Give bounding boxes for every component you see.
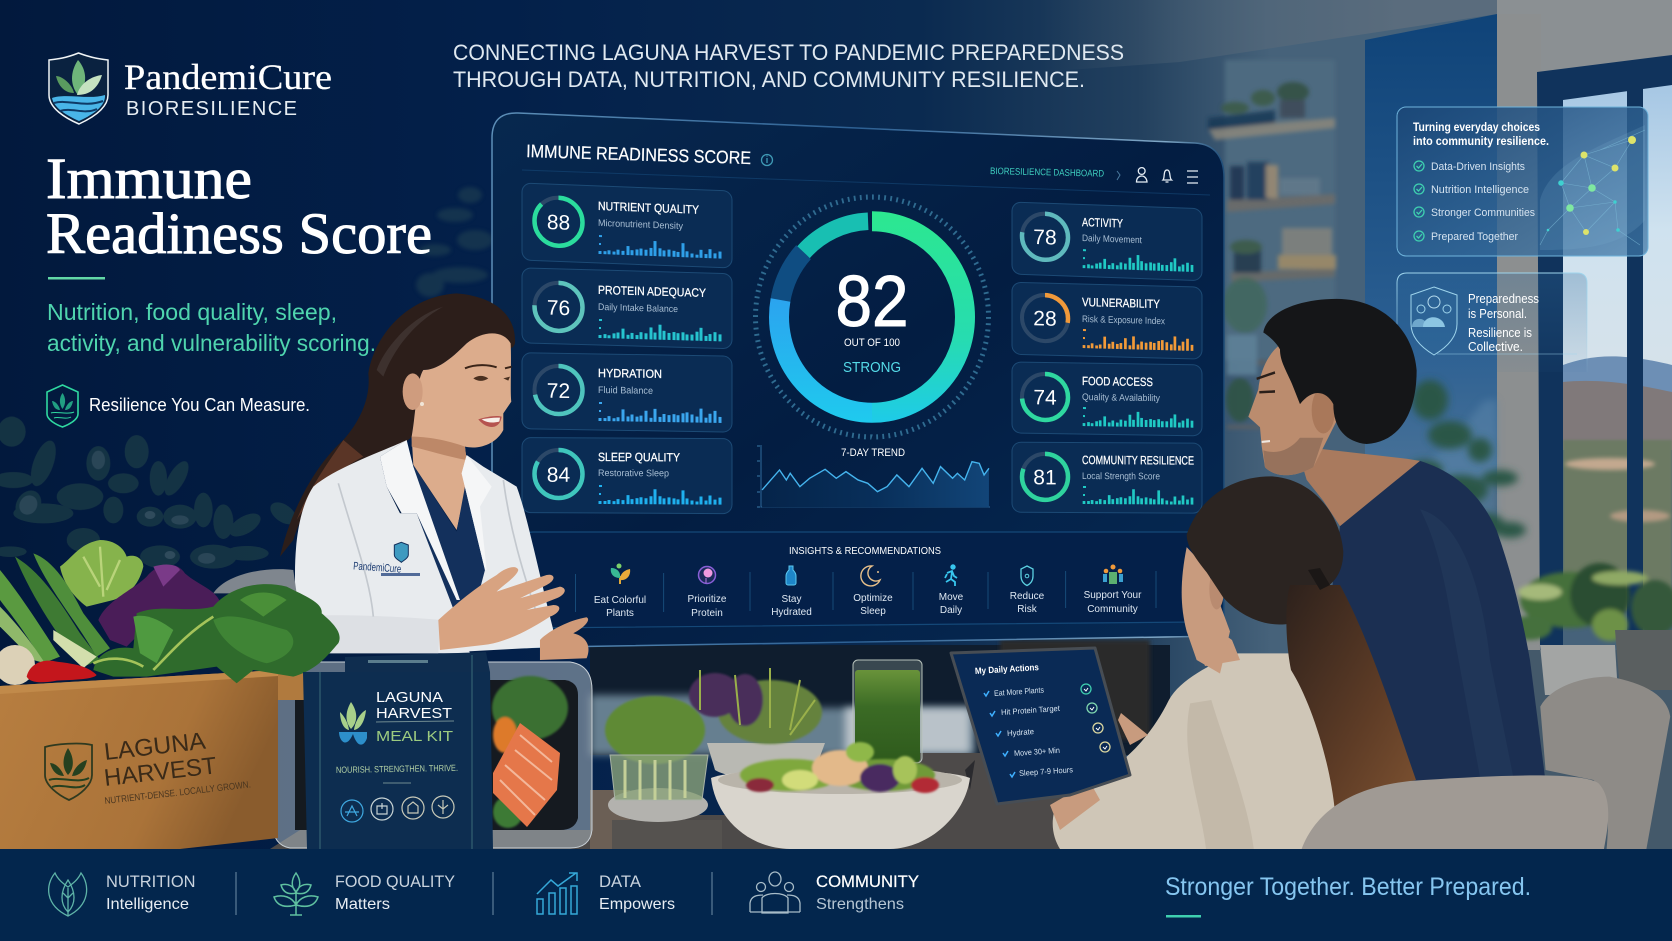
person: woman presenter (280, 293, 589, 660)
card: vulnerability (1012, 282, 1202, 359)
crate wordmark: NUTRIENT-DENSE. LOCALLY GROWN. (104, 779, 251, 807)
item: eat colorful plants (594, 564, 646, 619)
floating panel: community resilience: into community resilience. (1413, 136, 1549, 148)
card: activity: ACTIVITY (1082, 215, 1123, 231)
card: vulnerability: 28 (1033, 307, 1057, 331)
card: sleep quality: Restorative Sleep (598, 468, 669, 479)
table (270, 753, 1180, 849)
brand tagline: BIORESILIENCE (126, 98, 297, 120)
scrubs (413, 465, 487, 652)
top statement (453, 40, 1124, 92)
kit name: LAGUNA (376, 689, 443, 706)
card: vulnerability: Risk & Exposure Index (1082, 314, 1165, 327)
footer: food quality matters: FOOD QUALITY (335, 872, 455, 891)
item: reduce risk: Risk (1017, 604, 1038, 615)
footer: nutrition intelligence: Intelligence (106, 896, 189, 913)
item: support your community: Support Your (1084, 590, 1142, 601)
footer: data empowers: Empowers (599, 896, 675, 913)
blurred plant near man (1407, 380, 1526, 538)
item: stay hydrated: Stay (781, 594, 802, 605)
brand logo lockup (49, 53, 332, 124)
card: protein adequacy: PROTEIN ADEQUACY (598, 283, 706, 300)
microgreens cup (605, 696, 708, 822)
wooden crate (0, 670, 348, 849)
ponytail (1286, 585, 1416, 812)
person: girl (1050, 476, 1416, 849)
badge: resilience you can measure (47, 385, 310, 427)
plant lower right with pots (1508, 563, 1672, 695)
tablet: Eat More Plants (994, 686, 1044, 698)
tablet: Hit Protein Target (1001, 704, 1061, 717)
card: protein adequacy: Daily Intake Balance (598, 302, 678, 315)
hands (1050, 713, 1148, 830)
meal tray (273, 662, 592, 848)
main heading (46, 146, 432, 266)
card: hydration: 72 (547, 380, 570, 403)
crate logo (45, 744, 92, 800)
footer: food quality matters (274, 872, 455, 915)
item: move daily: Move (939, 592, 964, 603)
main heading: Immune (46, 146, 252, 211)
network map (1540, 130, 1645, 245)
floating panel: preparedness (1397, 273, 1587, 372)
item: eat colorful plants: Eat Colorful (594, 595, 646, 606)
card: activity: Daily Movement (1082, 233, 1142, 246)
subheading: Nutrition, food quality, sleep, (47, 299, 337, 325)
card: food access: Quality & Availability (1082, 392, 1160, 404)
insights and recommendations panel (525, 532, 1204, 628)
icon: shield with people (1411, 287, 1457, 355)
badge: resilience you can measure: Resilience You Can Measure. (89, 395, 310, 415)
chairs (1302, 677, 1670, 849)
smoothie glass (853, 660, 922, 763)
purple cabbage (98, 565, 222, 647)
head and hair (1182, 476, 1343, 673)
card: vulnerability: VULNERABILITY (1082, 295, 1160, 311)
lab coat (295, 440, 557, 653)
card: food access: 74 (1033, 386, 1057, 410)
chart: 7-day trend (757, 445, 990, 507)
subheading (47, 299, 376, 356)
footer: data empowers: DATA (599, 872, 642, 891)
card: sleep quality: 84 (547, 464, 570, 487)
item: reduce risk: Reduce (1010, 591, 1045, 602)
item: move daily (939, 565, 964, 616)
panel text: Preparedness (1468, 292, 1539, 306)
blurred background plants left (0, 417, 300, 569)
floating panel: community resilience (1397, 107, 1648, 256)
checklist (1414, 161, 1535, 243)
fresh produce (0, 540, 340, 685)
item: support your community (1084, 564, 1142, 615)
dashboard title: IMMUNE READINESS SCORE (526, 141, 751, 168)
tablet (951, 648, 1130, 804)
crate wordmark (103, 728, 251, 807)
item: support your community: Community (1087, 604, 1138, 615)
item: optimize sleep (853, 566, 893, 617)
score caption: OUT OF 100 (844, 337, 900, 349)
coat logo shield (394, 542, 408, 562)
card: community resilience: Local Strength Score (1082, 471, 1160, 482)
hands (438, 567, 565, 650)
tablet: Hydrate (1007, 727, 1035, 738)
footer: community strengthens: Strengthens (816, 896, 904, 913)
shelves with decor (1208, 82, 1336, 429)
kit logo (339, 702, 367, 745)
item: prioritize protein (688, 566, 727, 619)
checklist: Prepared Together (1431, 231, 1518, 243)
leeks (15, 557, 100, 667)
item: stay hydrated: Hydrated (771, 607, 812, 618)
card: food access: FOOD ACCESS (1082, 374, 1153, 389)
crate wordmark: LAGUNA (103, 728, 207, 766)
meal kit box: HARVEST (376, 705, 452, 722)
item: optimize sleep: Sleep (860, 606, 886, 617)
card: hydration: HYDRATION (598, 366, 662, 381)
blurred plants behind headline (416, 187, 493, 297)
footer: nutrition intelligence: NUTRITION (106, 872, 196, 891)
dark leafy greens (93, 584, 340, 683)
checklist: Stronger Communities (1431, 207, 1535, 219)
checklist: Data-Driven Insights (1431, 161, 1525, 173)
item: reduce risk (1010, 566, 1045, 615)
panel text: Resilience is (1468, 326, 1532, 340)
card: community resilience (1012, 442, 1202, 513)
top statement: THROUGH DATA, NUTRITION, AND COMMUNITY RESILIENCE. (453, 67, 1085, 92)
card: sleep quality (522, 438, 732, 514)
lettuce (60, 540, 143, 607)
card: nutrient quality: NUTRIENT QUALITY (598, 199, 699, 217)
icon: shield logo (49, 53, 108, 124)
item: stay hydrated (771, 566, 812, 618)
item: eat colorful plants: Plants (606, 608, 634, 619)
kit tagline: NOURISH. STRENGTHEN. THRIVE. (336, 763, 458, 775)
card: protein adequacy: 76 (547, 297, 570, 320)
score status: STRONG (843, 359, 901, 376)
footer: data empowers (537, 872, 675, 914)
card: nutrient quality: Micronutrient Density (598, 218, 683, 232)
card: activity (1012, 202, 1202, 281)
card: activity: 78 (1033, 226, 1057, 250)
card: nutrient quality (522, 183, 732, 268)
card: community resilience: COMMUNITY RESILIENCE (1082, 453, 1194, 468)
meal kit box: MEAL KIT (376, 728, 453, 745)
tablet: Move 30+ Min (1014, 746, 1060, 758)
sweater (1053, 653, 1413, 849)
footer band (0, 849, 1672, 941)
footer tagline: Stronger Together. Better Prepared. (1165, 873, 1531, 901)
dashboard nav (990, 166, 1198, 183)
card: nutrient quality: 88 (547, 211, 570, 235)
card: food access (1012, 362, 1202, 436)
footer: food quality matters: Matters (335, 896, 390, 913)
insights heading: INSIGHTS & RECOMMENDATIONS (789, 545, 941, 557)
main heading: Readiness Score (46, 201, 432, 266)
item: move daily: Daily (940, 605, 962, 616)
card: hydration (522, 353, 732, 432)
score value: 82 (836, 262, 908, 342)
crate wordmark: HARVEST (103, 752, 218, 792)
item: prioritize protein: Protein (691, 608, 723, 619)
chart: 7-day trend: 7-DAY TREND (841, 447, 905, 459)
card: protein adequacy (522, 268, 732, 349)
checklist: Nutrition Intelligence (1431, 184, 1529, 196)
subheading: activity, and vulnerability scoring. (47, 330, 376, 356)
gauge: overall score 82 (756, 197, 988, 437)
panel text (1468, 292, 1539, 354)
meal kit box (303, 652, 493, 849)
kit benefit icons (341, 796, 454, 822)
footer: community strengthens (750, 872, 919, 913)
footer: community strengthens: COMMUNITY (816, 872, 919, 891)
card: hydration: Fluid Balance (598, 385, 653, 397)
item: optimize sleep: Optimize (853, 593, 893, 604)
icon: info (762, 154, 772, 166)
person: man (1248, 299, 1545, 800)
tablet: My Daily Actions (975, 662, 1039, 676)
footer: nutrition intelligence (49, 872, 196, 916)
card: sleep quality: SLEEP QUALITY (598, 450, 680, 464)
coat logo text: PandemiCure (353, 560, 402, 576)
dashboard nav: BIORESILIENCE DASHBOARD (990, 166, 1104, 180)
hair (280, 293, 515, 557)
onion (0, 645, 35, 685)
dashboard panel (492, 113, 1224, 648)
panel heading: Turning everyday choices (1413, 122, 1540, 134)
item: prioritize protein: Prioritize (688, 594, 727, 605)
salad bowl (711, 742, 970, 849)
microgreens bowl (689, 668, 825, 779)
top statement: CONNECTING LAGUNA HARVEST TO PANDEMIC PREPAREDNESS (453, 40, 1124, 65)
card: community resilience: 81 (1033, 466, 1057, 489)
brand name: PandemiCure (124, 57, 332, 97)
panel text: Collective. (1468, 340, 1523, 354)
tablet: Sleep 7-9 Hours (1019, 765, 1073, 778)
tomato (27, 661, 97, 682)
panel text: is Personal. (1468, 307, 1527, 321)
